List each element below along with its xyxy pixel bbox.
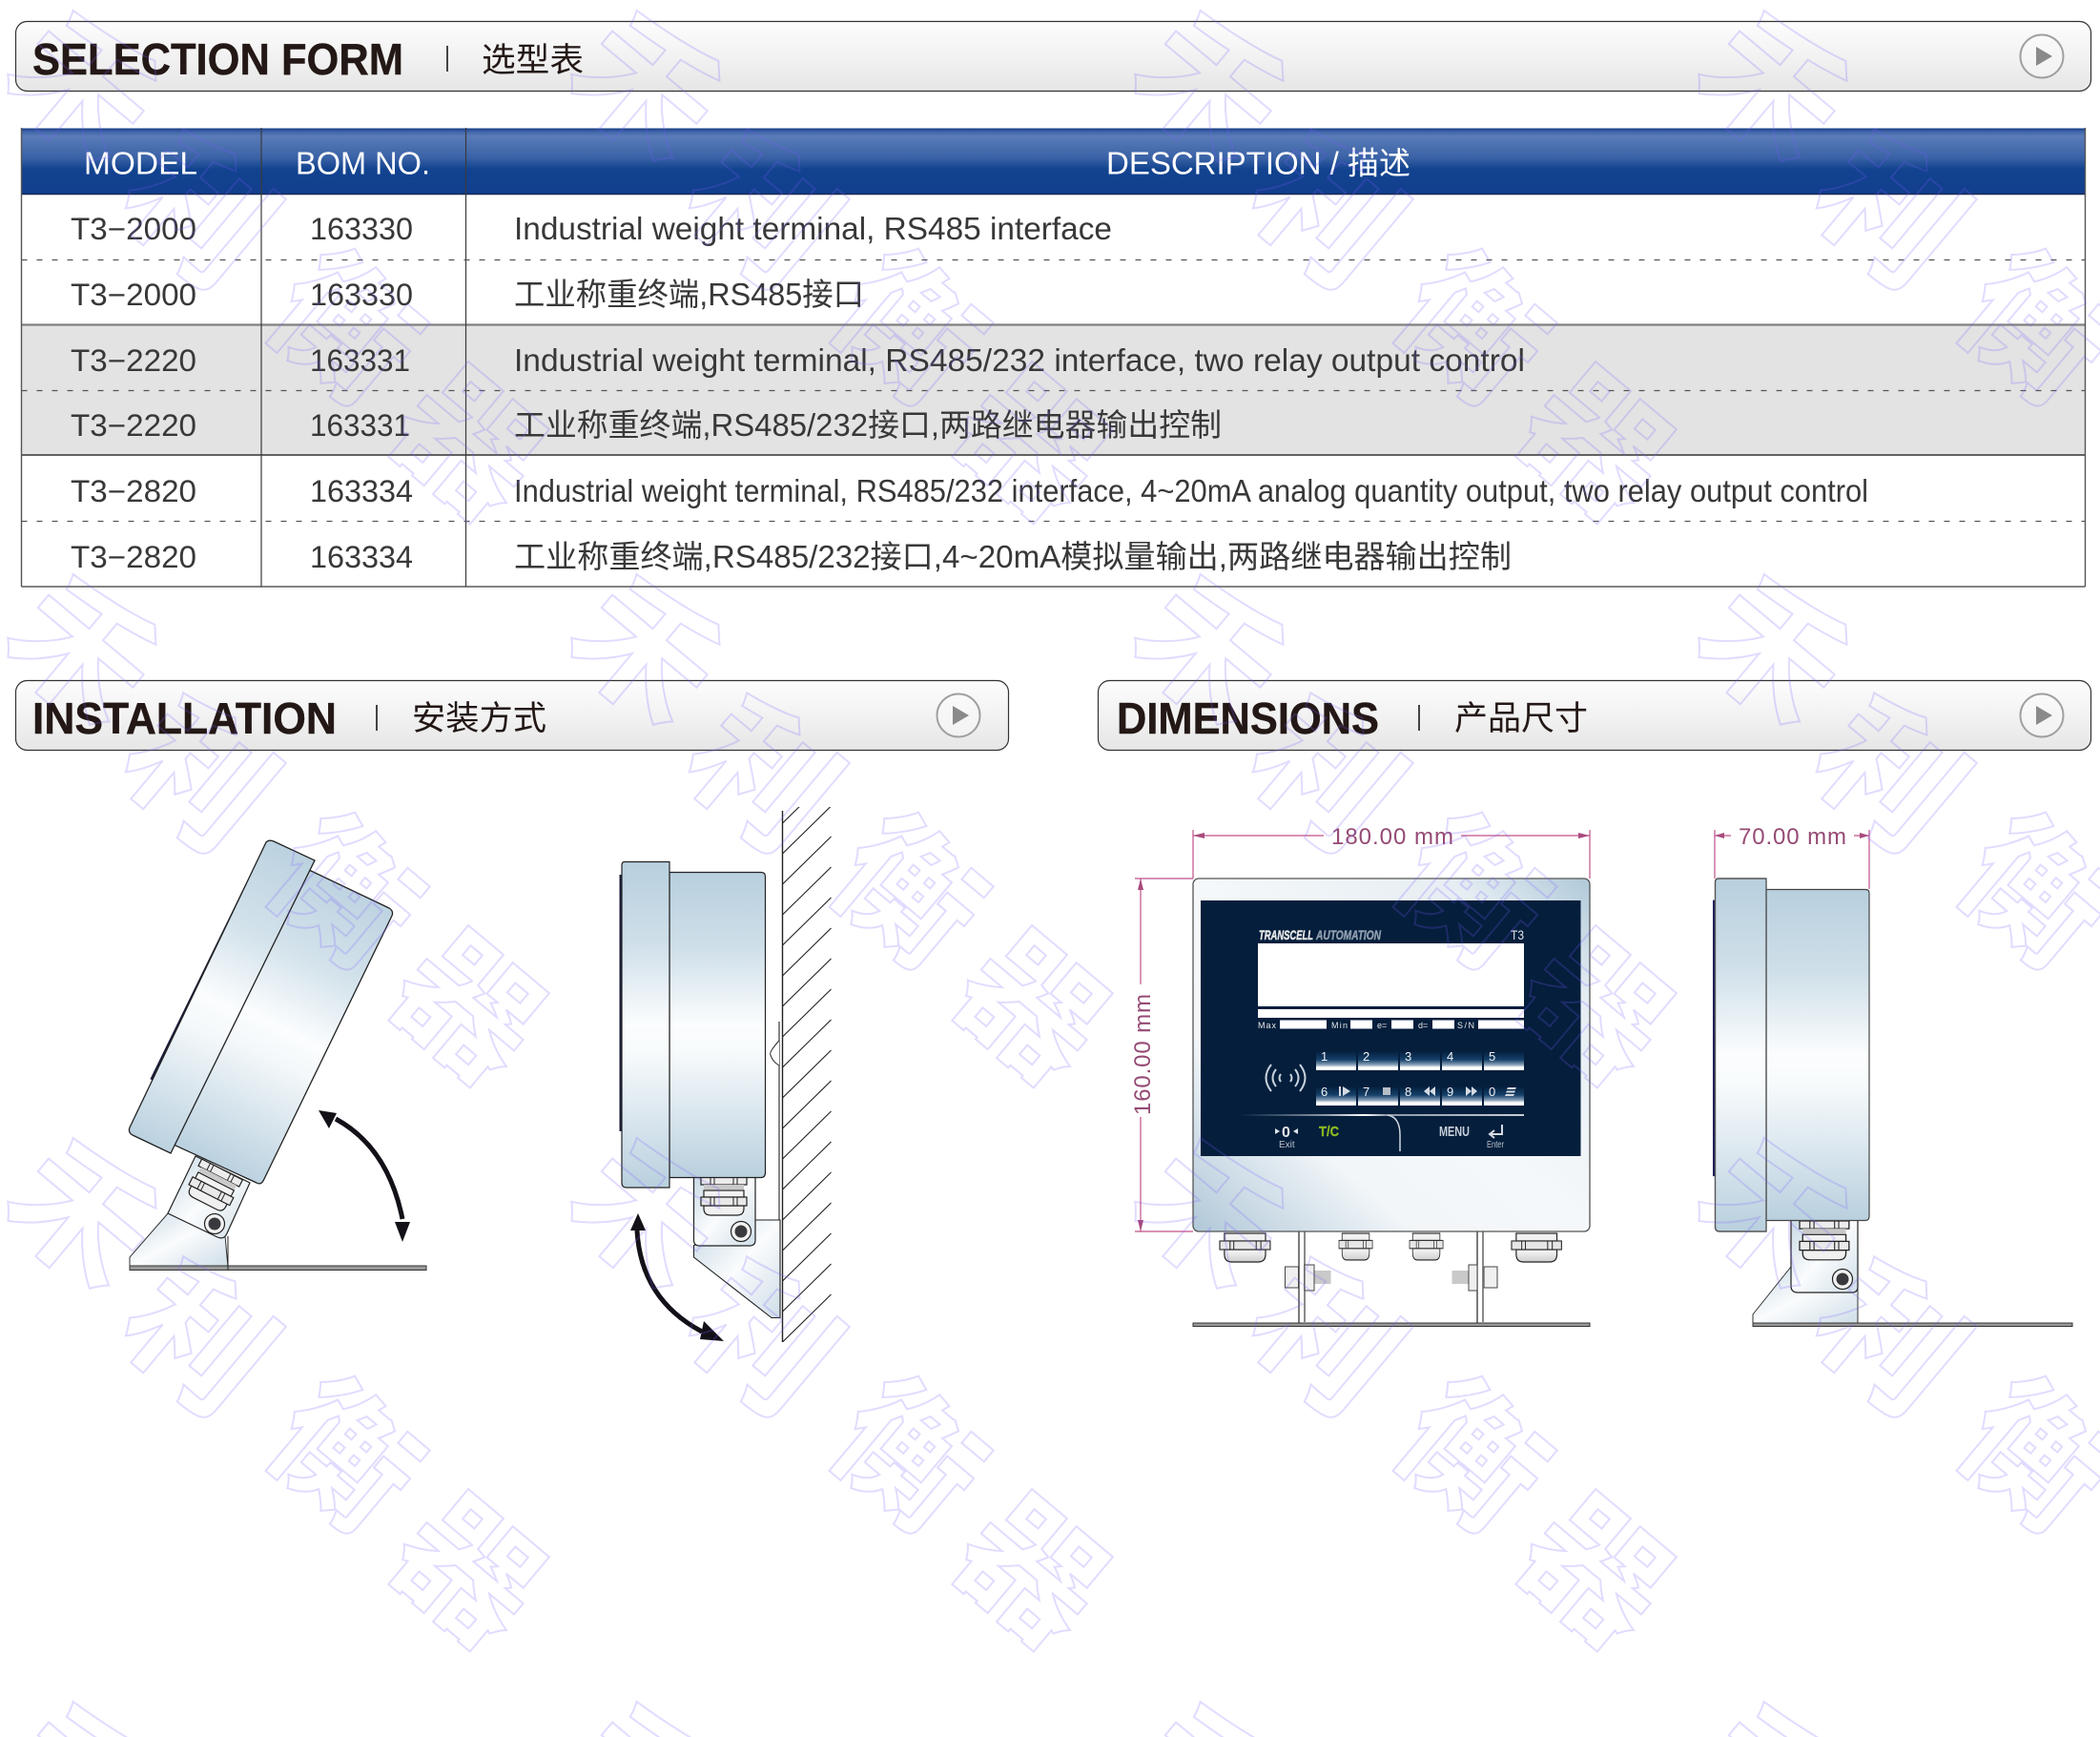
text: 衡 xyxy=(804,790,1010,998)
text: 利 xyxy=(1785,1236,1991,1444)
text: 器 xyxy=(1492,904,1698,1112)
screw xyxy=(204,1213,225,1234)
key row two: 0 xyxy=(1489,1085,1495,1099)
icon: play button xyxy=(2020,34,2064,78)
capacity labels: S/N xyxy=(1457,1021,1474,1030)
row: T3-2000 chinese: 163330 xyxy=(310,278,413,312)
triangular bracket xyxy=(694,1220,780,1318)
text: 禾 xyxy=(1669,548,1875,756)
text: 衡 xyxy=(1368,790,1574,998)
brand text xyxy=(1259,927,1382,942)
key row one: 4 xyxy=(1447,1049,1453,1064)
key row one: 3 xyxy=(1405,1049,1411,1064)
front display strip xyxy=(620,875,622,1131)
text: 器 xyxy=(1492,341,1698,548)
key label: zero exit xyxy=(1275,1125,1298,1150)
screw xyxy=(731,1221,751,1242)
row: T3-2000 english xyxy=(71,211,1112,246)
row: T3-2820 english: 163334 xyxy=(310,474,413,508)
icon: play button xyxy=(2020,694,2064,736)
text: 器 xyxy=(364,341,570,548)
dimension: 70 mm depth xyxy=(1715,824,1869,889)
rear body xyxy=(1766,889,1869,1221)
text: 利 xyxy=(658,1236,864,1444)
row: T3-2000 chinese xyxy=(71,277,864,312)
row: T3-2000 english: 163330 xyxy=(310,212,413,246)
key label: enter: Enter xyxy=(1487,1140,1505,1150)
section bar: installation xyxy=(15,681,1009,750)
cable glands xyxy=(1220,1233,1561,1262)
key row two xyxy=(1316,1085,1524,1106)
heading: dimensions: DIMENSIONS xyxy=(1117,693,1379,743)
row: T3-2220 english: Industrial weight terminal, RS485/232 interface, two relay output control xyxy=(514,342,1525,378)
row: T3-2820 chinese xyxy=(71,539,1512,574)
column header: model: MODEL xyxy=(84,145,197,181)
key label: enter xyxy=(1487,1125,1505,1150)
row: T3-2820 english: Industrial weight terminal, RS485/232 interface, 4~20mA analog quantity output, two relay output control xyxy=(514,473,1868,508)
dimension: 180 mm width xyxy=(1193,824,1590,879)
mounting bracket base xyxy=(130,1212,228,1267)
bracket arm xyxy=(694,1173,755,1246)
heading separator xyxy=(376,705,378,731)
model label: T3 xyxy=(1511,927,1524,942)
base plate line xyxy=(130,1236,426,1271)
key row two: 7 xyxy=(1363,1085,1369,1099)
row: T3-2820 chinese: 163334 xyxy=(310,540,413,574)
heading: chinese installation: 安装方式 xyxy=(412,700,546,737)
row: T3-2220 chinese: T3−2220 xyxy=(71,408,196,443)
text: 器 xyxy=(1492,1468,1698,1676)
text: 利 xyxy=(1222,1236,1428,1444)
grey row band one xyxy=(21,325,2085,455)
row: T3-2220 english: T3−2220 xyxy=(71,343,196,378)
text: 衡 xyxy=(804,226,1010,434)
text: 器 xyxy=(364,1468,570,1676)
device: tilted desktop mount xyxy=(129,840,426,1271)
wall line and hatching xyxy=(782,775,832,1342)
text: 利 xyxy=(94,1236,300,1444)
key label: zero exit: 0 xyxy=(1282,1125,1290,1141)
front flange xyxy=(1715,879,1766,1231)
front flange xyxy=(129,840,315,1153)
table header band xyxy=(21,128,2085,195)
text: 禾 xyxy=(1105,548,1311,756)
text: 利 xyxy=(1222,109,1428,317)
row: T3-2000 english: Industrial weight terminal, RS485 interface xyxy=(514,211,1112,246)
row: T3-2820 chinese: 工业称重终端,RS485/232接口,4~20mA模拟量输出,两路继电器输出控制 xyxy=(514,539,1512,574)
front flange xyxy=(622,862,669,1188)
key row one xyxy=(1316,1049,1524,1070)
lcd window xyxy=(1258,943,1524,1006)
text: 衡 xyxy=(240,1354,446,1561)
row: T3-2000 chinese: 工业称重终端,RS485接口 xyxy=(514,277,864,312)
capacity labels: d= xyxy=(1418,1021,1428,1030)
dimension: 70 mm depth: 70.00 mm xyxy=(1739,824,1846,850)
arrow: tilt range xyxy=(319,1110,410,1242)
heading separator xyxy=(446,46,448,72)
key label: zero exit: Exit xyxy=(1279,1140,1295,1150)
capacity labels: Max xyxy=(1258,1021,1276,1030)
sweep line xyxy=(1240,1114,1524,1151)
bracket arm xyxy=(168,1156,250,1238)
triangular bracket xyxy=(1753,1267,1858,1323)
front display strip xyxy=(1713,900,1716,1176)
text: 器 xyxy=(928,1468,1134,1676)
text: 衡 xyxy=(240,226,446,434)
base plate line xyxy=(1193,1323,1590,1326)
row: T3-2220 english: 163331 xyxy=(310,343,410,378)
front display strip xyxy=(152,852,263,1080)
text: 衡 xyxy=(1368,1354,1574,1561)
heading: installation: INSTALLATION xyxy=(32,693,337,743)
row: T3-2000 chinese: T3−2000 xyxy=(71,278,196,312)
cable gland xyxy=(1800,1221,1849,1260)
text: 器 xyxy=(928,341,1134,548)
arrow: tilt range xyxy=(630,1213,724,1341)
row: T3-2220 english xyxy=(71,342,1525,378)
capacity labels: e= xyxy=(1377,1021,1387,1030)
row: T3-2220 chinese: 163331 xyxy=(310,408,410,443)
text: 器 xyxy=(364,904,570,1112)
display panel xyxy=(1201,900,1581,1156)
heading: chinese selection form: 选型表 xyxy=(482,42,584,79)
key row two: 9 xyxy=(1447,1085,1453,1099)
cable gland xyxy=(701,1177,747,1215)
bracket plates xyxy=(1299,1231,1483,1323)
text: 利 xyxy=(1222,672,1428,880)
key row one: 1 xyxy=(1321,1049,1328,1064)
column header: description: DESCRIPTION / 描述 xyxy=(1106,145,1410,181)
dimension: 160 mm height xyxy=(1130,879,1193,1231)
key label: menu: MENU xyxy=(1439,1124,1470,1140)
text: 利 xyxy=(94,672,300,880)
cable gland xyxy=(184,1159,242,1214)
table grid lines xyxy=(21,128,2085,587)
selection table xyxy=(21,128,2085,587)
text: 利 xyxy=(658,109,864,317)
device: wall mount xyxy=(620,775,832,1342)
column header: bom no: BOM NO. xyxy=(296,145,430,181)
text: 利 xyxy=(1785,672,1991,880)
key row one: 2 xyxy=(1363,1049,1369,1064)
row: T3-2820 english: T3−2820 xyxy=(71,474,196,508)
text: 禾 xyxy=(542,1112,748,1320)
rear body xyxy=(174,870,393,1184)
capacity labels: Min xyxy=(1331,1021,1348,1030)
screw xyxy=(1833,1269,1852,1290)
text: 利 xyxy=(94,109,300,317)
section bar: dimensions xyxy=(1099,681,2090,750)
dimension: 160 mm height: 160.00 mm xyxy=(1130,994,1156,1115)
wall mount plate and bump xyxy=(771,1022,779,1317)
text: 衡 xyxy=(240,790,446,998)
brand text: TRANSCELL xyxy=(1259,927,1313,942)
text: 衡 xyxy=(804,1354,1010,1561)
key row two: 8 xyxy=(1405,1085,1411,1099)
text: 器 xyxy=(928,904,1134,1112)
text: 禾 xyxy=(1105,1112,1311,1320)
text: 禾 xyxy=(1669,1112,1875,1320)
icon: play button xyxy=(937,694,980,736)
row: T3-2220 chinese xyxy=(71,407,1222,443)
heading: selection form: SELECTION FORM xyxy=(32,34,403,84)
key row one: 5 xyxy=(1489,1049,1495,1064)
heading: chinese dimensions: 产品尺寸 xyxy=(1454,700,1588,737)
bracket arm xyxy=(1791,1216,1858,1292)
base plate line xyxy=(1753,1323,2072,1326)
text: 利 xyxy=(658,672,864,880)
heading separator xyxy=(1418,705,1420,731)
device: front view xyxy=(1193,879,1590,1326)
mounting bolts xyxy=(1286,1265,1497,1291)
row: T3-2820 chinese: T3−2820 xyxy=(71,540,196,574)
dimension: 180 mm width: 180.00 mm xyxy=(1331,824,1453,850)
text: 衡 xyxy=(1368,226,1574,434)
enclosure front xyxy=(1193,879,1590,1231)
row: T3-2000 english: T3−2000 xyxy=(71,212,196,246)
rear body xyxy=(669,872,765,1177)
row: T3-2220 chinese: 工业称重终端,RS485/232接口,两路继电器输出控制 xyxy=(514,407,1222,443)
text: 利 xyxy=(1785,109,1991,317)
capacity labels xyxy=(1258,1021,1524,1030)
icon: wireless signal xyxy=(1266,1065,1305,1091)
brand text: AUTOMATION xyxy=(1315,927,1382,942)
section bar: selection form xyxy=(15,21,2090,92)
device: side view xyxy=(1713,879,2072,1326)
key label: tare clear: T/C xyxy=(1319,1124,1339,1140)
key row two: 6 xyxy=(1321,1085,1328,1099)
text: 禾 xyxy=(542,548,748,756)
